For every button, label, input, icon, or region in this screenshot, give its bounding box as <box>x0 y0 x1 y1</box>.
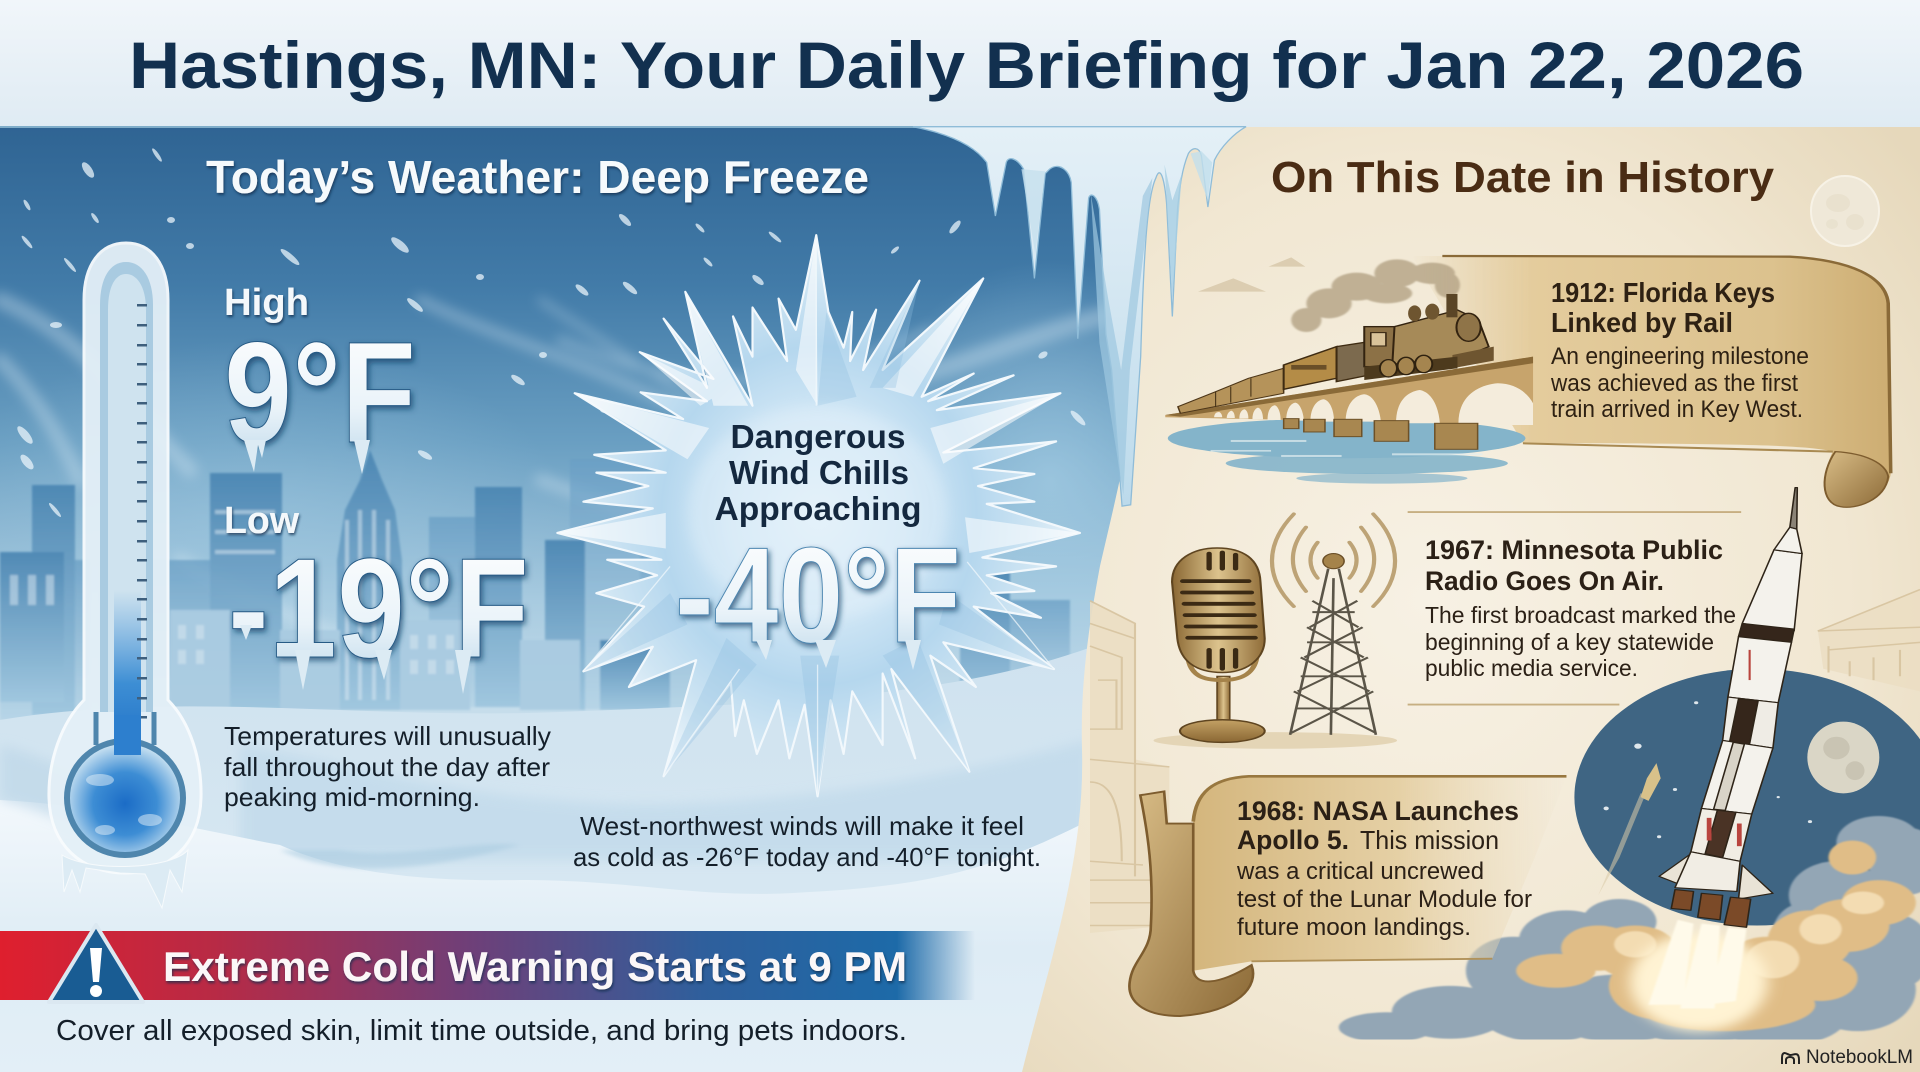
value: high temperature: 9°F <box>224 312 416 473</box>
text: 1967 entry: Radio Goes On Air. <box>1425 566 1664 596</box>
moon <box>1807 722 1879 793</box>
text: 1912 entry: train arrived in Key West. <box>1551 396 1803 423</box>
icon: moon <box>1811 176 1879 246</box>
icon: icicles <box>913 127 1246 506</box>
text: 1968 entry: This mission <box>1360 825 1499 855</box>
text: 1912 entry <box>1550 277 1809 423</box>
text: temperature note: fall throughout the day after <box>224 752 550 782</box>
banner: cold warning: Extreme Cold Warning Starts at 9 PM <box>163 943 907 990</box>
text: 1968 entry: Apollo 5. <box>1237 825 1349 855</box>
value: low temperature: -19°F <box>228 529 529 688</box>
snow hills <box>0 640 1110 1072</box>
illustration: rocket launch <box>1339 488 1920 1046</box>
scroll: 1912 <box>1412 256 1891 507</box>
heading: history: On This Date in History <box>1271 153 1775 202</box>
night sky circle <box>1574 669 1920 925</box>
text: temperature note: peaking mid-morning. <box>224 782 480 812</box>
logo: NotebookLM: NotebookLM <box>1806 1047 1913 1068</box>
heading: today's weather: Today’s Weather: Deep Freeze <box>206 151 869 203</box>
panel: 1967 radio <box>1154 514 1397 749</box>
text: temperature note: Temperatures will unusually <box>224 721 551 751</box>
text: dangerous wind chills: Approaching <box>714 490 922 527</box>
text: 1912 entry: 1912: Florida Keys <box>1551 277 1775 308</box>
rocket flame <box>1649 920 1746 1008</box>
scroll: 1968 <box>1129 776 1566 1016</box>
icon: radio tower <box>1272 514 1395 735</box>
text: 1968 entry <box>1236 796 1532 941</box>
panel: weather background <box>0 126 1240 1072</box>
banner: cold warning <box>0 925 975 1002</box>
text: 1967 entry <box>1425 535 1736 681</box>
text: wind note: as cold as -26°F today and -40°F tonight. <box>573 842 1041 872</box>
text: 1968 entry: test of the Lunar Module for <box>1237 886 1532 913</box>
text: temperature note <box>224 721 551 812</box>
text: 1968 entry: future moon landings. <box>1237 914 1471 941</box>
title: Hastings, MN: Your Daily Briefing for Jan 22, 2026 <box>129 28 1804 102</box>
icon: warning triangle <box>49 925 143 1002</box>
panel: history background <box>1022 127 1920 1072</box>
icon: microphone <box>1154 548 1397 749</box>
value: wind chill: -40°F <box>675 519 961 671</box>
text: 1967 entry: The first broadcast marked the <box>1425 602 1736 628</box>
text: 1968 entry: 1968: NASA Launches <box>1237 796 1519 826</box>
text: dangerous wind chills: Wind Chills <box>729 454 909 491</box>
small distant rocket <box>1598 763 1661 895</box>
text: 1912 entry: was achieved as the first <box>1550 370 1798 397</box>
clouds <box>1339 816 1920 1046</box>
text: safety advice: Cover all exposed skin, limit time outside, and bring pets indoors. <box>56 1015 907 1047</box>
decorative background buildings <box>1090 589 1920 933</box>
label: low: Low <box>224 500 299 542</box>
text: 1967 entry: public media service. <box>1425 655 1638 681</box>
snowflakes <box>15 147 1087 518</box>
header band <box>0 0 1920 127</box>
panel: 1912 railway <box>1165 256 1891 507</box>
label: high: High <box>224 282 309 324</box>
text: wind note <box>573 811 1041 872</box>
icon: thermometer <box>49 243 201 908</box>
illustration: train on bridge <box>1165 257 1533 484</box>
text: wind note: West-northwest winds will make it feel <box>580 811 1024 841</box>
divider lines <box>1408 512 1741 705</box>
text: dangerous wind chills <box>714 418 922 527</box>
city skyline <box>0 450 1070 720</box>
text: dangerous wind chills: Dangerous <box>730 418 906 455</box>
icon: ice starburst <box>557 235 1080 796</box>
text: 1968 entry: was a critical uncrewed <box>1236 858 1484 885</box>
text: 1967 entry: beginning of a key statewide <box>1425 629 1714 655</box>
rocket body <box>1659 488 1802 927</box>
text: 1912 entry: An engineering milestone <box>1551 343 1809 370</box>
text: 1912 entry: Linked by Rail <box>1551 307 1733 338</box>
text: 1967 entry: 1967: Minnesota Public <box>1425 535 1723 565</box>
